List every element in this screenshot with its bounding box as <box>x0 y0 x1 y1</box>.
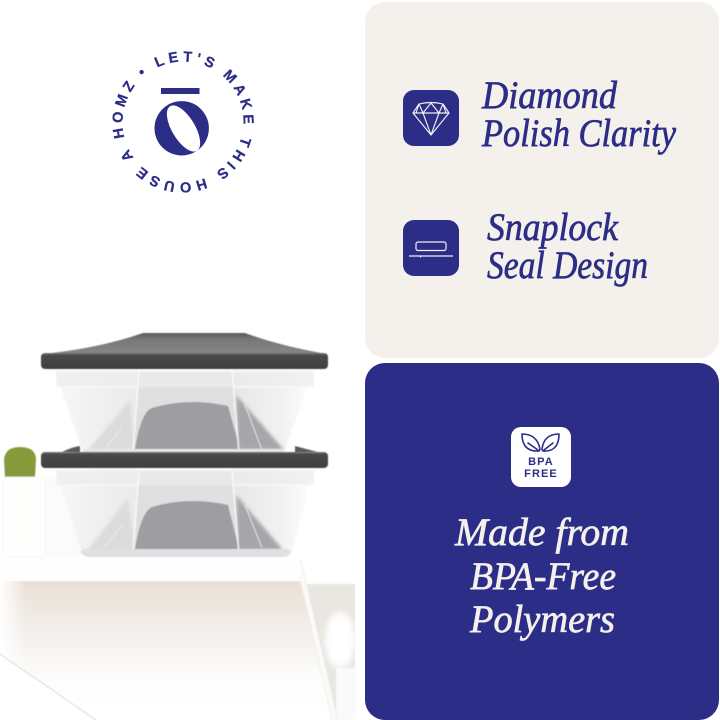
shelf bracket and background right <box>296 560 356 720</box>
product: upper storage box <box>44 370 325 453</box>
shelf edge <box>0 558 300 581</box>
circular slogan: • LET'S MAKE THIS HOUSE A HOMZ <box>112 51 254 193</box>
heading: snaplock seal design: Seal Design <box>487 244 648 287</box>
panel: product photo <box>0 0 360 720</box>
icon: BPA free badge: BPA <box>528 456 554 468</box>
heading: diamond polish clarity: Polish Clarity <box>481 112 677 155</box>
heading: snaplock seal design: Snaplock <box>487 206 619 249</box>
heading: diamond polish clarity: Diamond <box>481 74 617 117</box>
heading: made from BPA-free polymers <box>454 511 629 641</box>
shelf underside wall <box>0 581 336 720</box>
product: upper lid <box>41 333 328 369</box>
icon: BPA free badge: FREE <box>524 468 558 480</box>
logo: circular badge <box>112 51 254 193</box>
heading: made from BPA-free polymers: Made from <box>454 511 629 554</box>
icon: diamond <box>403 90 459 146</box>
heading: made from BPA-free polymers: Polymers <box>469 598 615 641</box>
product: lower storage box <box>44 469 325 557</box>
heading: made from BPA-free polymers: BPA-Free <box>470 555 616 598</box>
panel: features <box>365 2 719 358</box>
icon: cactus in white pot <box>3 447 81 558</box>
logo mark <box>154 88 209 157</box>
panel: BPA free <box>365 363 719 720</box>
heading: diamond polish clarity <box>481 74 677 155</box>
icon: snaplock seal <box>403 220 459 276</box>
icon: BPA free badge <box>511 427 571 487</box>
heading: snaplock seal design <box>487 206 648 287</box>
product: lower lid rim <box>41 452 328 468</box>
